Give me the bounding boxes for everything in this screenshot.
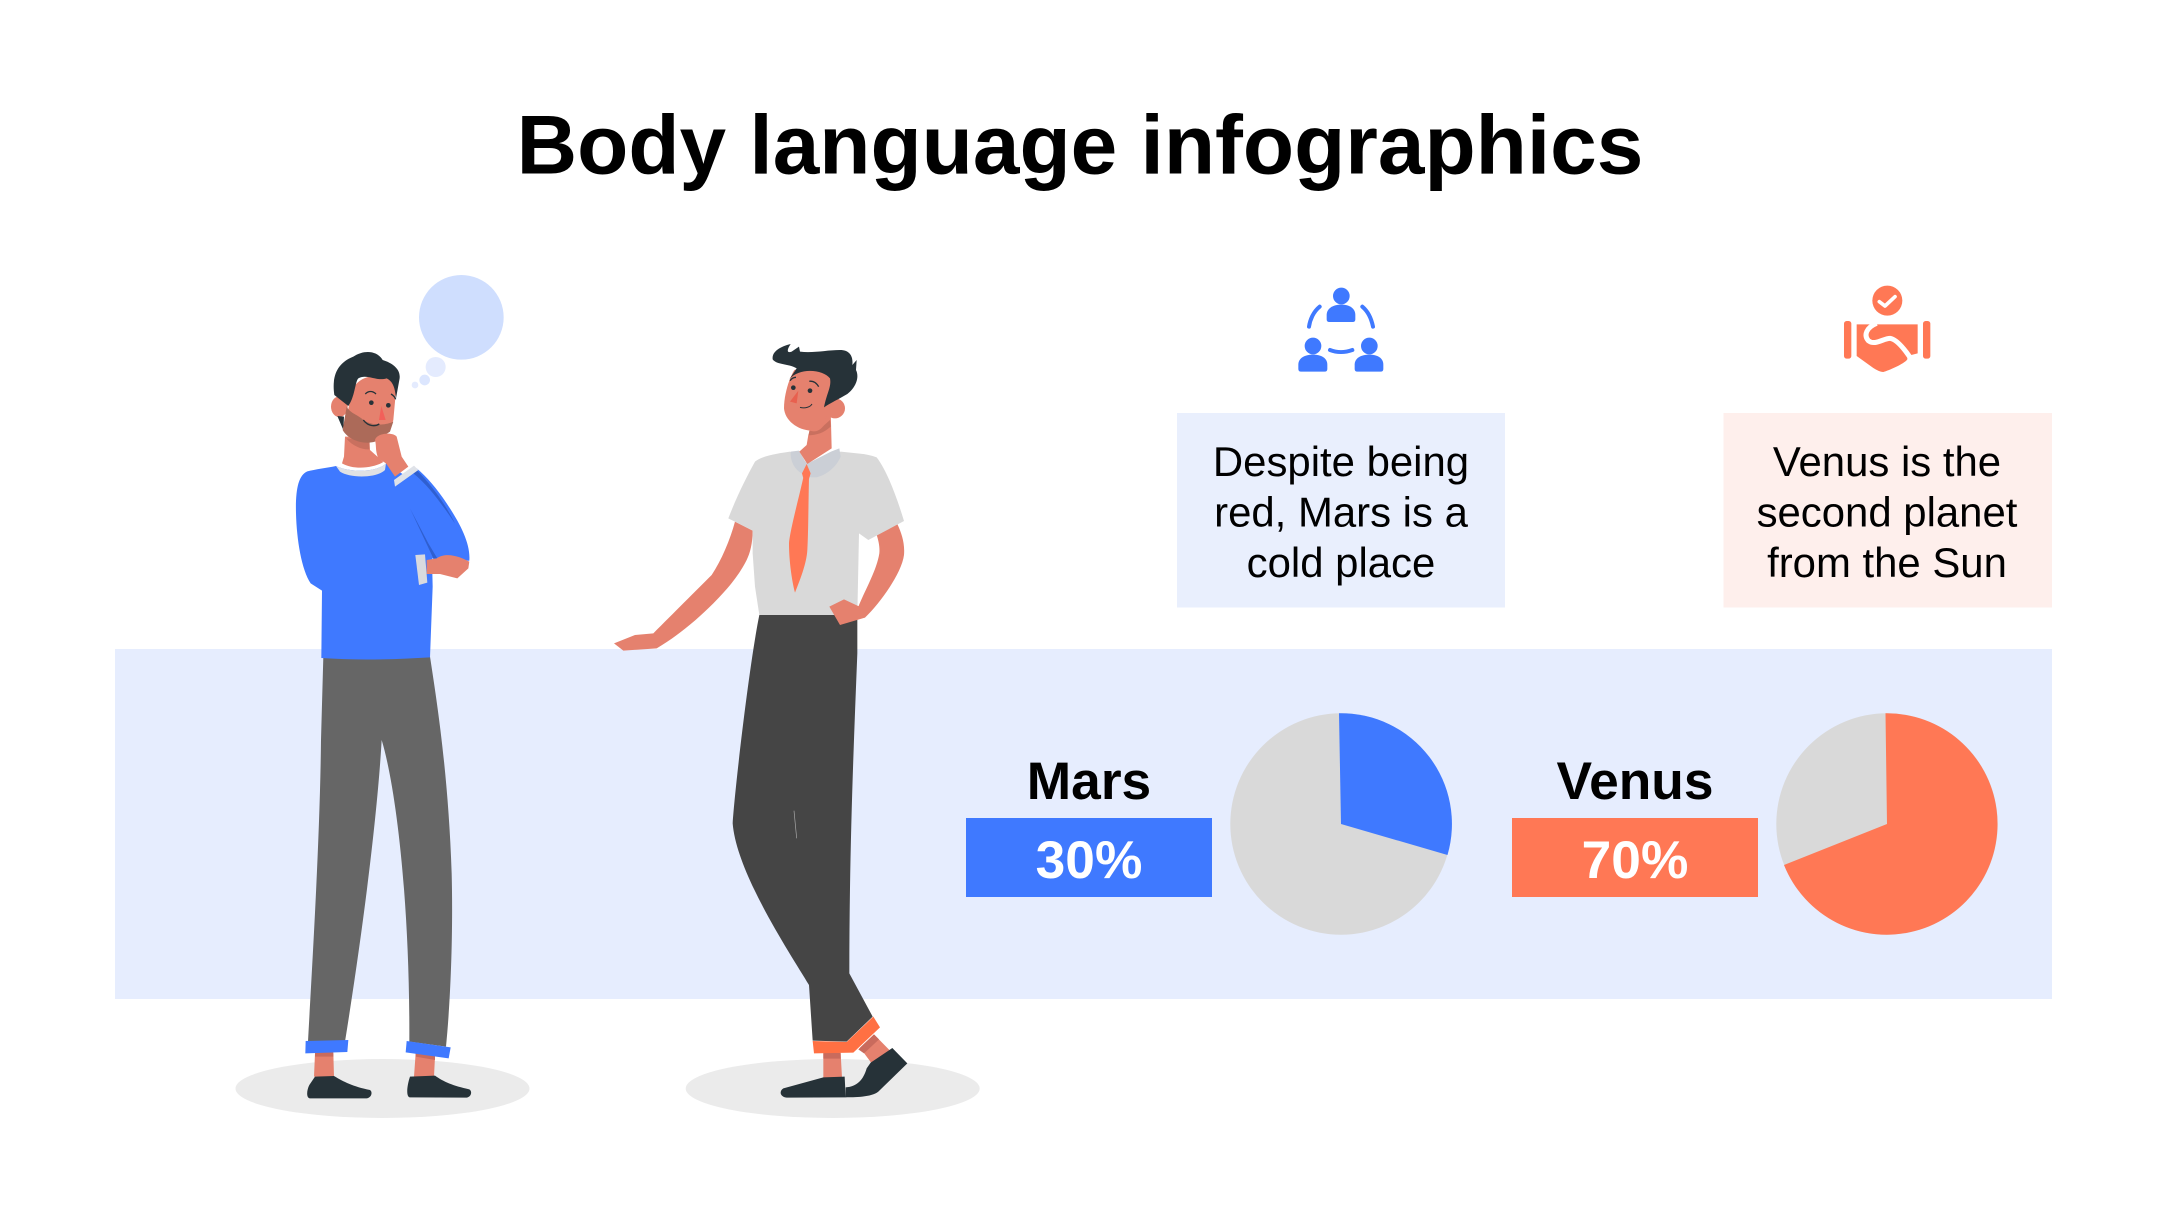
leaning man upper body	[614, 344, 904, 651]
thought bubble	[412, 275, 504, 388]
value bar: Mars 30%	[966, 818, 1212, 897]
icon: team circle	[1298, 288, 1383, 372]
text box: Venus: from the Sun	[1767, 539, 2007, 586]
ground shadow: leaning man	[686, 1059, 980, 1118]
text box: Mars	[1177, 413, 1505, 608]
illustration: thinking man	[296, 352, 471, 1098]
text box: Venus: second planet	[1757, 488, 2018, 535]
text box: Mars: Despite being	[1213, 438, 1469, 485]
text box: Venus: Venus is the	[1773, 438, 2001, 485]
value bar: Venus 70%: 70%	[1582, 831, 1688, 890]
background band	[115, 649, 2052, 999]
text box: Mars: cold place	[1247, 539, 1435, 586]
leaning man legs	[733, 615, 907, 1098]
pie chart: Mars 30%	[1230, 713, 1452, 935]
label: Venus: Venus	[1556, 752, 1714, 811]
value bar: Mars 30%: 30%	[1036, 831, 1142, 890]
title: Body language infographics	[517, 97, 1643, 191]
illustration: leaning man	[614, 344, 907, 1098]
thinking man legs	[305, 657, 471, 1098]
text box: Mars: red, Mars is a	[1214, 488, 1469, 535]
value bar: Venus 70%	[1512, 818, 1758, 897]
ground shadow: thinking man	[236, 1059, 530, 1118]
text box: Venus	[1724, 413, 2052, 608]
thinking man upper body	[296, 352, 469, 659]
icon: handshake with check	[1844, 286, 1930, 372]
pie chart: Venus 70%	[1776, 713, 1998, 935]
label: Mars: Mars	[1027, 752, 1151, 811]
